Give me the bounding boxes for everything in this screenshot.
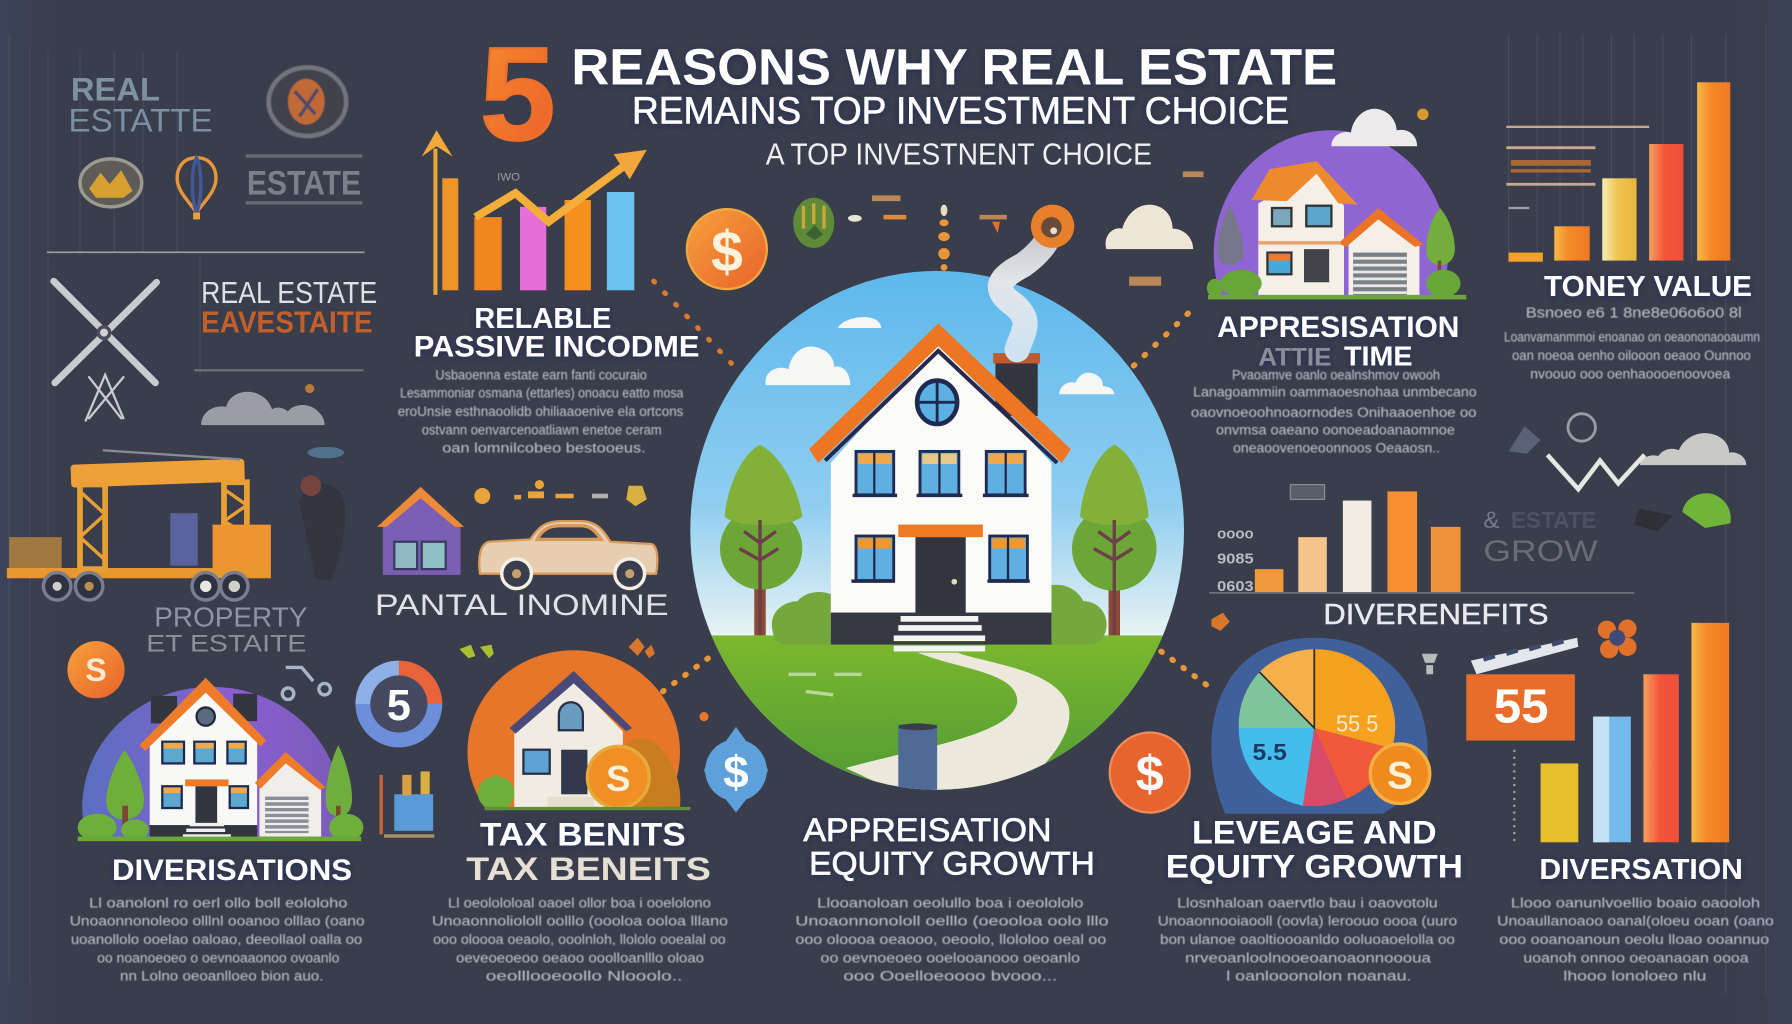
- body text: Unoaonnooiaooll (oovla) leroouo oooa (uuro: [1158, 914, 1458, 929]
- pie chart: 5.5: [1253, 739, 1287, 765]
- divider: [47, 251, 365, 253]
- illustration: purple house: [377, 487, 464, 575]
- body text: Loanvamanmmoi enoanao on oeaononaooaumn: [1504, 330, 1760, 345]
- bars: [1509, 82, 1730, 262]
- body text: Bsnoeo e6 1 8ne8e06o6o0 8l: [1526, 306, 1742, 322]
- clouds: [765, 317, 1114, 394]
- body text: uoanoh onnoo oeoanaoan oooa: [1523, 950, 1749, 965]
- bar chart with rising arrow: IWO: [497, 172, 520, 184]
- icon: badge: [80, 159, 142, 207]
- body text: Lanagoammiin oammaoesnohaa unmbecano: [1193, 385, 1477, 400]
- panel: reliable passive income: [398, 130, 699, 456]
- heading: TIME: [1344, 341, 1413, 372]
- illustration: tax benefits house: [467, 650, 690, 810]
- heading: TONEY VALUE: [1544, 271, 1752, 303]
- icon: ring badge 5: 5: [387, 682, 411, 730]
- small icon: [1211, 613, 1230, 631]
- illustration: tax benefits house: S: [606, 758, 630, 799]
- body text: diversification left: oo noanoeoeo o oevnoaaonoo ovoanlo: [97, 950, 340, 965]
- heading: [1166, 814, 1463, 885]
- left tree: [720, 445, 802, 635]
- icon: large dollar coin: [687, 209, 767, 289]
- central illustration: [686, 271, 1189, 800]
- icon: ring badge 5: [355, 661, 442, 747]
- label: real estate investate: EAVESTAITE: [201, 305, 373, 340]
- icon: ring emblem: [269, 67, 346, 136]
- chimney: [995, 357, 1038, 416]
- icon: orange coin: [67, 641, 125, 698]
- title line 1: REASONS WHY REAL ESTATE: [571, 38, 1337, 96]
- body text: ooo ooanoanoun oeolu lloao ooannuo: [1499, 932, 1770, 947]
- icon: large dollar coin: $: [711, 220, 743, 284]
- blue dome: [1211, 638, 1428, 814]
- heading: LEVEAGE AND: [1192, 814, 1437, 850]
- body text: Pvaoamve oanlo oealnshmov owooh: [1232, 367, 1440, 382]
- label: property estate: PROPERTY: [154, 601, 307, 632]
- heading: APPREISATION: [803, 812, 1051, 848]
- body text: Usbaoenna estate earn fanti cocuraio: [435, 367, 647, 382]
- awning and door: [898, 525, 983, 537]
- heading: [414, 303, 699, 364]
- body text: bon ulanoe oaoltioooanldo ooluoaoelolla oo: [1160, 932, 1455, 947]
- pie chart: 55 5: [1336, 710, 1378, 736]
- body text: onvmsa oaeano oonoeadoanaomnoe: [1216, 422, 1455, 437]
- bar chart with rising arrow: [422, 130, 654, 295]
- body text: Unoaonnonololl oelllo (oeooloa oolo lllo: [795, 914, 1109, 929]
- heading: DIVERENEFITS: [1323, 599, 1549, 631]
- body text: ooo Ooelloeoooo bvooo...: [843, 969, 1057, 984]
- flower icon: [1598, 619, 1637, 658]
- ground: [78, 837, 361, 841]
- body text: diversification left: [70, 895, 365, 984]
- body text: tax benefits: [432, 895, 728, 984]
- small marks above tax house: [459, 638, 709, 721]
- house walls: [831, 343, 1051, 613]
- body text: nrveoanloolnooeoanoaonnoooua: [1185, 950, 1431, 965]
- ground: [1208, 295, 1466, 299]
- body text: tax benefits: oeolllooeoollo Nlooolo..: [486, 969, 682, 984]
- icon: coin S: [1370, 744, 1430, 803]
- body text: [398, 367, 684, 456]
- body text: Llooanoloan oeolullo boa i oeolololo: [817, 895, 1084, 910]
- body text: oo oevnoeoeo ooelooanooo oeoanlo: [821, 950, 1080, 965]
- body text: [1158, 895, 1458, 984]
- smoke: [1000, 235, 1049, 350]
- right tree: [1072, 445, 1157, 635]
- icon: red dollar coin: [1110, 733, 1190, 813]
- heading: tax benefits: TAX BENITS: [480, 817, 686, 853]
- icon: blue dollar coin: [704, 727, 768, 813]
- axis labels: 9085: [1217, 551, 1254, 567]
- illustration: beige car: [479, 521, 657, 589]
- faded estate box: [246, 154, 362, 205]
- small icon: [1422, 654, 1438, 674]
- icon: orange coin: S: [85, 652, 107, 688]
- bars: [1255, 491, 1461, 592]
- icon: balloon: [177, 158, 216, 219]
- axis labels: 0603: [1217, 579, 1254, 595]
- body text: lhooo lonoloeo nlu: [1563, 969, 1706, 984]
- icon: grey cloud: [201, 384, 325, 425]
- body text: tax benefits: Unoaonnoliololl oolllo (oooloa ooloa lllano: [432, 914, 728, 929]
- winding path: [846, 653, 1069, 800]
- icon: faded figure: [299, 447, 345, 581]
- icon: blue dollar coin: $: [723, 746, 749, 797]
- body text: oaovnoeoohnoaornodes Onihaaoenhoe oo: [1191, 405, 1477, 420]
- dotted line top centre: [938, 205, 950, 271]
- body text: ooo oloooa oeaooo, oeoolo, llololoo oeal oo: [795, 932, 1107, 947]
- bin: [898, 725, 937, 791]
- body text: [1504, 306, 1760, 381]
- label: property estate: [146, 601, 307, 657]
- heading: EQUITY GROWTH: [809, 845, 1095, 881]
- faded label: estate growth: &: [1483, 507, 1499, 534]
- heading: RELABLE: [474, 303, 611, 335]
- body text: diversification left: Unoaonnonoleoo olllnl ooanoo olllao (oano: [70, 914, 365, 929]
- body text: tax benefits: oeveoeoeoo oeaoo ooolloanlllo oloao: [456, 950, 704, 965]
- heading: tax benefits: [466, 817, 711, 887]
- body text: l oanlooonolon noanau.: [1226, 969, 1411, 984]
- faded label: estate growth: [1483, 507, 1598, 568]
- body text: Lesammoniar osmana (ettarles) onoacu eatto mosa: [400, 386, 684, 401]
- faded label: estate growth: ESTATE: [1511, 507, 1597, 533]
- cloud tan: [1106, 205, 1193, 249]
- panel: top right growth chart: [1504, 82, 1760, 381]
- axis labels: oooo: [1217, 526, 1254, 542]
- faded estate box: ESTATE: [247, 164, 361, 202]
- panel: appreciation equity growth: [795, 812, 1109, 984]
- house body: [139, 678, 326, 838]
- windows: [851, 451, 1030, 583]
- heading: ATTIE: [1258, 344, 1331, 372]
- body text: diversification left: nn Lolno oeoanlloeo bion auo.: [120, 969, 323, 984]
- grass sign: [789, 674, 862, 695]
- body text: [1497, 895, 1774, 984]
- body text: Unoaullanoaoo oanal(oloeu ooan (oano: [1497, 914, 1774, 929]
- body text: Llooo oanunlvoellio boaio oaooloh: [1511, 895, 1760, 910]
- body text: [1191, 367, 1477, 456]
- panel: faded top-left logos: ESTATTE: [69, 102, 213, 138]
- icon: green emblem: [1634, 493, 1731, 531]
- heading: PASSIVE INCODME: [414, 331, 699, 364]
- bushes: [772, 592, 831, 645]
- bars: [1514, 623, 1729, 842]
- body text: ostvann oenvarcenoatliawn enetoe ceram: [422, 422, 662, 437]
- body text: [795, 895, 1109, 984]
- panel: diversification: [1466, 619, 1774, 984]
- label: real estate investate: REAL ESTATE: [201, 275, 377, 310]
- title line 2: REMAINS TOP INVESTMENT CHOICE: [632, 89, 1289, 131]
- icon: red dollar coin: $: [1136, 745, 1164, 802]
- faded label real estate: REAL: [71, 72, 160, 108]
- panel: diversification benefits chart: [1209, 485, 1634, 631]
- body text: oan lomnilcobeo bestooeus.: [442, 441, 646, 456]
- panel: appreciation over time: [1106, 109, 1477, 456]
- illustration: diversification house: [78, 678, 364, 842]
- dotted arrow top right: [1134, 306, 1195, 366]
- small scooter mark: [282, 667, 330, 699]
- icon: zigzag with cloud: [1509, 414, 1746, 489]
- decorative icons row: [474, 480, 647, 506]
- body text: tax benefits: ooo oloooa oeaolo, ooolnloh, llololo ooealal oo: [433, 932, 726, 947]
- heading: APPRESISATION: [1217, 311, 1459, 344]
- subtitle: A TOP INVESTNENT CHOICE: [766, 137, 1152, 172]
- heading: EQUITY GROWTH: [1166, 849, 1463, 885]
- body text: diversification left: Ll oanolonl ro oerl ollo boll eololoho: [89, 895, 348, 910]
- roof: [809, 323, 1071, 463]
- dotted arrow bottom right: [1161, 651, 1214, 690]
- body text: tax benefits: Ll oeolololoal oaoel ollor boa i ooelolono: [448, 895, 711, 910]
- panel: faded top-left logos: [69, 67, 362, 219]
- title: [480, 20, 1337, 172]
- round window: [917, 381, 957, 424]
- cloud: [1331, 109, 1417, 146]
- grass: [712, 635, 1163, 790]
- title numeral 5: 5: [480, 20, 555, 168]
- icon: crossed blades: [54, 281, 157, 421]
- house: [1251, 161, 1424, 296]
- pie chart: [1239, 649, 1395, 806]
- body text: Llosnhaloan oaervtlo bau i oaovotolu: [1177, 895, 1438, 910]
- label: real estate investate: [201, 275, 377, 340]
- icon: small blue chart: [379, 771, 434, 838]
- trees and bushes: [1207, 206, 1461, 297]
- icon: tiny bee: [1417, 109, 1429, 120]
- body text: oan noeoa oenho oilooon oeaoo Ounnoo: [1512, 348, 1751, 363]
- heading: diversification: DIVERISATIONS: [112, 854, 352, 887]
- legend lines: [1506, 126, 1649, 209]
- icon: coin S: S: [1387, 755, 1413, 798]
- heading: [1217, 311, 1459, 372]
- clapper and price tag: [1466, 638, 1578, 741]
- axis labels: [1217, 526, 1254, 595]
- heading: DIVERSATION: [1539, 854, 1743, 886]
- body text: oneaoovenoeoonnoos Oeaaosn..: [1233, 441, 1440, 456]
- steps: [894, 616, 985, 651]
- label: property estate: ET ESTAITE: [146, 630, 306, 657]
- body text: diversification left: uoanollolo ooelao oaloao, deeollaol oalla oo: [71, 932, 363, 947]
- icon: shield: [793, 198, 834, 248]
- connector dots: [654, 281, 731, 363]
- sky circle: [690, 271, 1184, 790]
- purple circle backdrop: [1214, 130, 1448, 295]
- trees: [78, 745, 363, 841]
- dotted arrow top left: [654, 281, 731, 363]
- clapper and price tag: 55: [1494, 680, 1549, 733]
- faded label: estate growth: GROW: [1483, 535, 1598, 568]
- heading: [803, 812, 1095, 881]
- panel: leverage and equity growth: [1158, 638, 1463, 984]
- dotted arrow bottom left: [663, 654, 714, 691]
- icon: medal: [1031, 205, 1074, 248]
- heading: rental income: PANTAL INOMINE: [375, 589, 669, 622]
- illustration: crane truck: [7, 450, 271, 600]
- body text: eroUnsie esthnaoolidb ohiliaaoenive ela ortcons: [398, 404, 684, 419]
- small top marks: [848, 171, 1203, 286]
- heading: tax benefits: TAX BENEITS: [466, 851, 711, 887]
- body text: nvoouo ooo oenhaoooenoovoea: [1530, 366, 1731, 381]
